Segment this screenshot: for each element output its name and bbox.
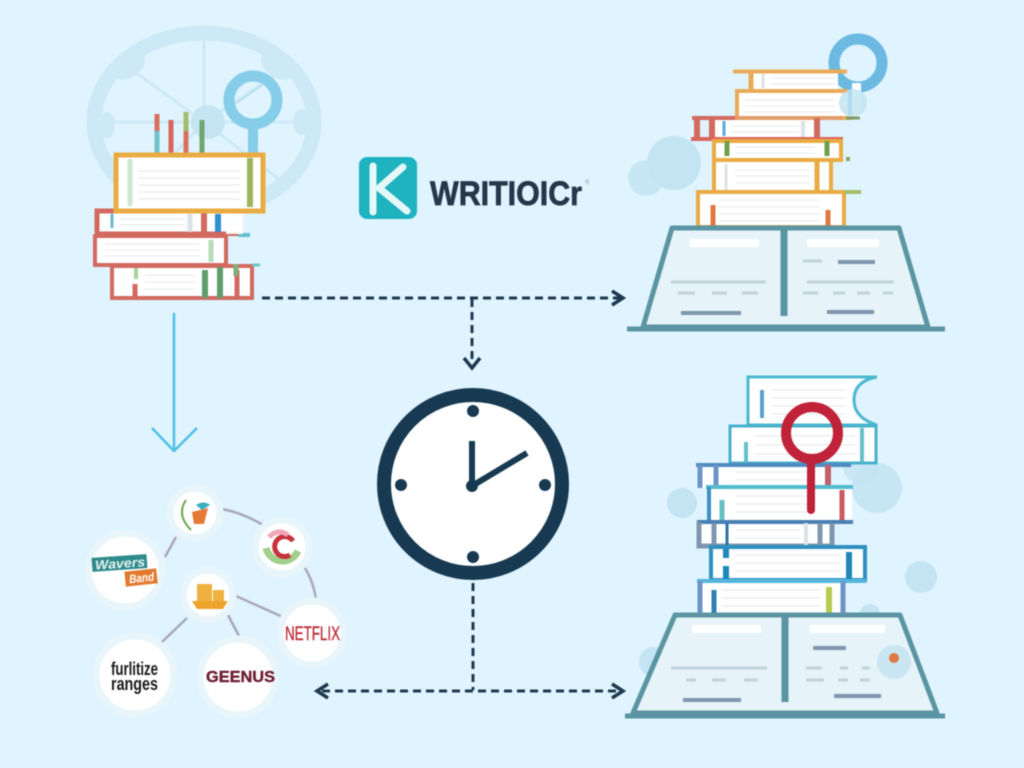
- connector: top horizontal dashed arrow: [262, 291, 623, 305]
- icon: background wheel: [94, 33, 314, 211]
- logo circle: Waves Band: [88, 533, 162, 607]
- icon: K logo badge: [359, 157, 417, 219]
- open book base: [625, 615, 945, 716]
- icon: blue magnifier: [834, 39, 882, 87]
- clock: [384, 395, 562, 573]
- illustration: bottom-right book stack: [625, 377, 945, 716]
- logo circle: Waves Band: Band: [128, 570, 155, 586]
- arrow: blue down: [152, 313, 197, 451]
- logo wordmark: WRITIOICr: [430, 175, 582, 213]
- decorative bubbles: [628, 136, 701, 196]
- icon: light blue magnifier: [229, 76, 277, 155]
- book: blue 3: [696, 465, 851, 520]
- book: orange 2: [737, 91, 853, 118]
- logo circle: coin stacks: [183, 570, 233, 620]
- icon: red magnifier: [786, 407, 838, 510]
- logo circle: furlitize ranges: ranges: [111, 674, 158, 694]
- logo circle: swirl: [170, 488, 220, 538]
- logo wordmark: ®: [585, 179, 590, 186]
- handle and bubble: [839, 83, 867, 118]
- book: upper red: [95, 211, 243, 234]
- logo circle: Geenus: GEENUS: [206, 669, 275, 686]
- bookmarks on top of stack: [157, 112, 202, 153]
- network links: [162, 509, 316, 642]
- logo circle: Waves Band: Wavers: [95, 554, 145, 573]
- logo circle: Netflix: [280, 601, 344, 665]
- network of brand logos: [88, 488, 344, 715]
- illustration: top-left book stack with wheel: [94, 33, 314, 298]
- book: blue 4: [706, 487, 853, 520]
- book: orange 4: [714, 160, 831, 192]
- book: blue 5: [697, 522, 853, 546]
- book: teal 1: [748, 377, 877, 425]
- book: top orange: [116, 155, 263, 211]
- connector: bottom dashed arrows: [317, 583, 623, 698]
- book: blue 6: [711, 547, 865, 580]
- connector: dashed arrow to clock: [464, 299, 480, 368]
- logo: [359, 157, 590, 219]
- book: orange 5: [698, 192, 861, 227]
- illustration: top-right book stack: [627, 39, 945, 329]
- logo circle: furlitize ranges: furlitize: [111, 659, 158, 679]
- book: orange 1: [733, 72, 847, 90]
- book: blue 7: [697, 581, 866, 614]
- decorative bubbles: [639, 448, 937, 677]
- book: middle red: [95, 234, 250, 265]
- logo circle: Netflix: NETFLIX: [285, 624, 340, 645]
- logo circle: furlitize ranges: [96, 636, 174, 714]
- open book base: [627, 228, 945, 329]
- book: bottom red: [112, 264, 260, 298]
- logo circle: Geenus: [200, 639, 276, 715]
- book: red: [691, 118, 843, 139]
- book: teal 2: [730, 426, 876, 463]
- logo circle: C mark: [255, 520, 309, 574]
- book: orange 3: [714, 141, 850, 160]
